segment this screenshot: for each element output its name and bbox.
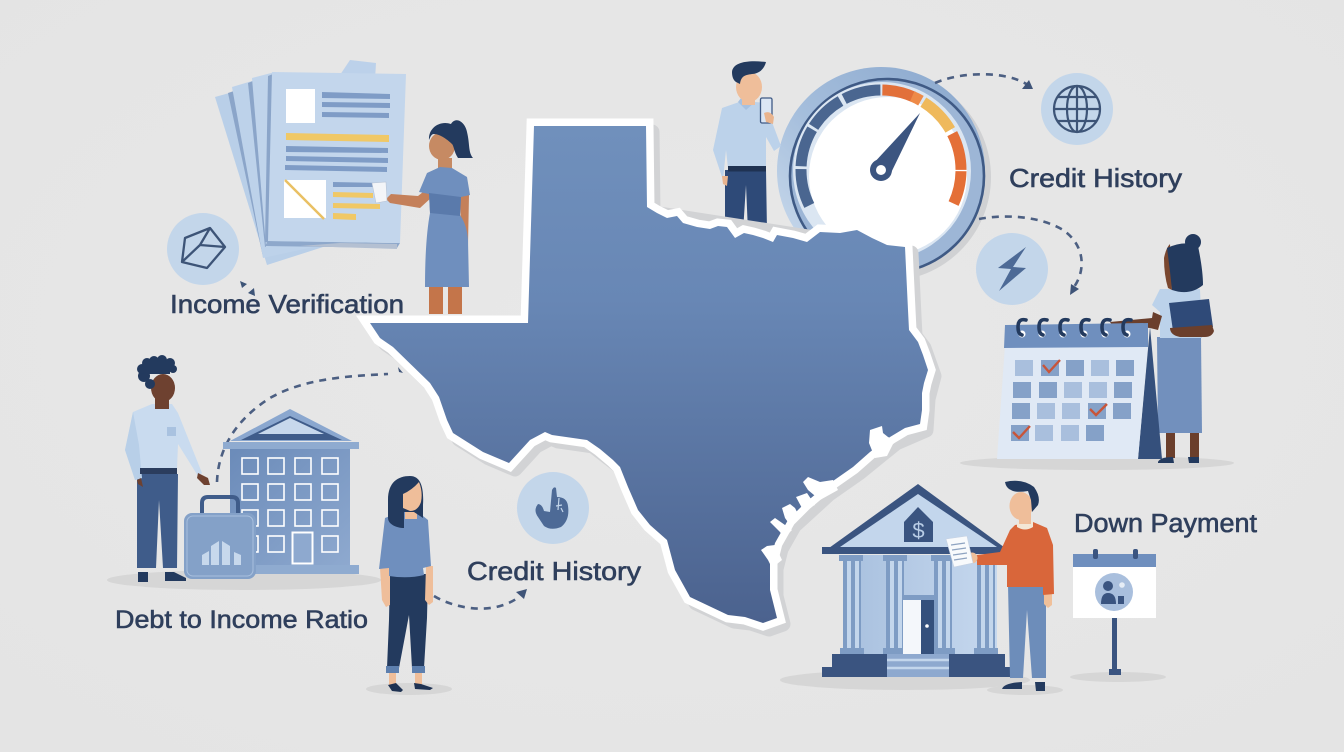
arrow: gauge to globe — [935, 74, 1033, 89]
arrow: woman to credit history — [434, 589, 527, 609]
figure: woman holding paper — [372, 120, 473, 314]
heading: Credit History top: Credit History — [1009, 163, 1182, 193]
panel: income verification documents — [215, 60, 406, 265]
heading: Income Verification: Income Verification — [170, 289, 404, 319]
figure: woman with folder — [1110, 234, 1214, 463]
figure: man in orange sweater — [946, 481, 1054, 691]
panel: office building with man — [107, 355, 381, 590]
panel: Texas map — [370, 126, 934, 629]
icon: down payment sign — [1070, 549, 1166, 682]
figure: man with phone — [713, 61, 781, 232]
office building — [223, 409, 359, 574]
icon: hand badge — [517, 472, 589, 544]
panel: bank with man — [780, 481, 1063, 695]
icon: briefcase with bars — [184, 497, 256, 579]
icon: dollar house: $ — [912, 518, 925, 543]
icon: dollar house — [904, 507, 933, 543]
figure: man with curly hair — [125, 355, 210, 582]
panel: calendar with woman — [960, 234, 1234, 470]
arrow: map to office building — [217, 367, 403, 482]
icon: lightning badge — [976, 233, 1048, 305]
heading: Down Payment: Down Payment — [1074, 510, 1257, 538]
icon: globe badge — [1041, 73, 1113, 145]
figure: woman with long hair — [366, 476, 452, 695]
arrow: gauge to calendar — [979, 217, 1082, 295]
heading: Credit History lower: Credit History — [467, 556, 641, 586]
panel: credit score gauge — [777, 67, 991, 281]
calendar page — [997, 320, 1162, 459]
arrow: income verification pointer — [240, 281, 255, 296]
heading: Debt to Income Ratio: Debt to Income Ratio — [115, 606, 368, 634]
icon: income verification polygon badge — [167, 213, 239, 285]
